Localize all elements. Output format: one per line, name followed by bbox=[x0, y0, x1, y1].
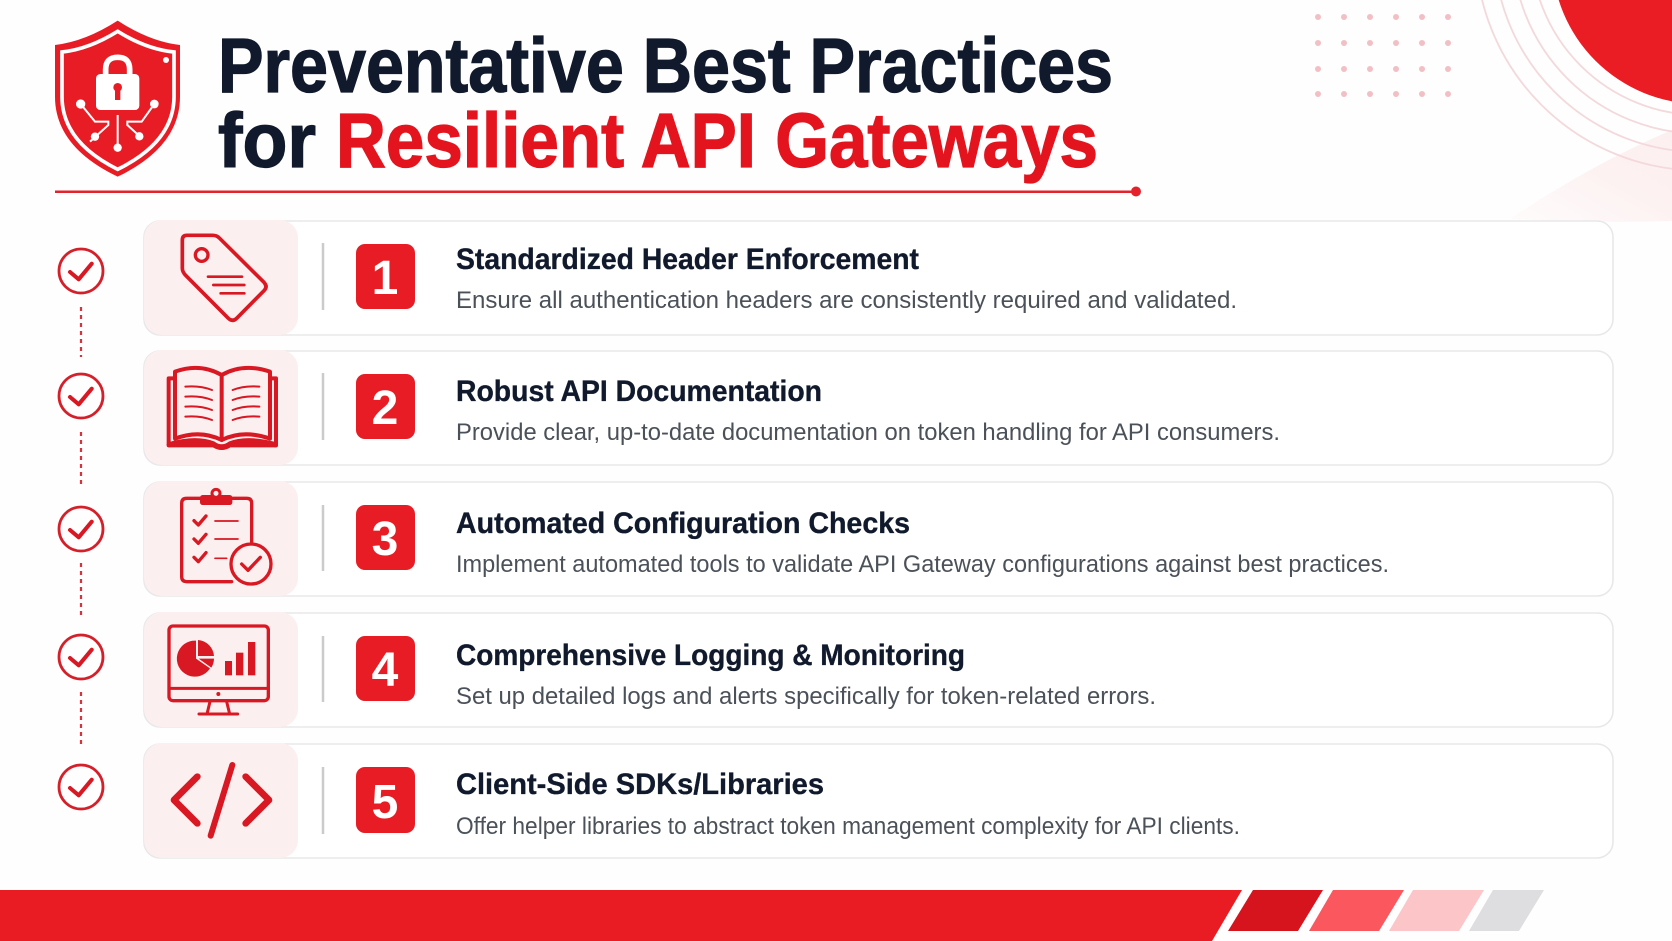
decorative corner: swoosh, rings and red circle bbox=[1476, 0, 1672, 222]
icon: open book bbox=[169, 368, 276, 448]
footer bar with stripes bbox=[0, 890, 1544, 941]
number badge 3: 3 bbox=[372, 513, 398, 566]
number badge 4 bbox=[356, 636, 415, 701]
title: for bbox=[218, 98, 316, 184]
step 4 row bbox=[59, 612, 1613, 727]
number badge 2 bbox=[356, 374, 415, 439]
icon panel 4 bbox=[144, 612, 298, 727]
icon: code brackets bbox=[174, 765, 269, 836]
heading 3: Automated Configuration Checks bbox=[456, 507, 910, 540]
card 4 bbox=[144, 613, 1613, 727]
heading 2: Robust API Documentation bbox=[456, 375, 822, 408]
divider 4 bbox=[322, 636, 324, 702]
description 4: Set up detailed logs and alerts specifically for token-related errors. bbox=[456, 683, 1156, 710]
step 5 row bbox=[59, 743, 1613, 858]
title: Preventative Best Practices bbox=[218, 23, 1113, 109]
description 5: Offer helper libraries to abstract token management complexity for API clients. bbox=[456, 813, 1240, 840]
check marker 4 bbox=[59, 635, 103, 679]
check marker 1 bbox=[59, 249, 103, 293]
number badge 1: 1 bbox=[372, 252, 398, 305]
card 1 bbox=[144, 221, 1613, 335]
title underline with end dot bbox=[55, 186, 1141, 196]
number badge 3 bbox=[356, 505, 415, 570]
timeline connectors bbox=[80, 307, 82, 747]
check marker 5 bbox=[59, 765, 103, 809]
decorative dot grid bbox=[1315, 14, 1451, 97]
card 5 bbox=[144, 744, 1613, 858]
icon: price tag bbox=[182, 235, 266, 320]
icon panel 2 bbox=[144, 350, 298, 465]
card 3 bbox=[144, 482, 1613, 596]
step 3 row bbox=[59, 481, 1613, 596]
icon panel 5 bbox=[144, 743, 298, 858]
title bbox=[218, 23, 1113, 184]
icon panel 1 bbox=[144, 220, 298, 335]
description 3: Implement automated tools to validate API Gateway configurations against best practices. bbox=[456, 551, 1389, 578]
number badge 2: 2 bbox=[372, 382, 398, 435]
divider 5 bbox=[322, 767, 324, 834]
heading 4: Comprehensive Logging & Monitoring bbox=[456, 639, 965, 672]
step 1 row bbox=[59, 220, 1613, 335]
number badge 5: 5 bbox=[372, 776, 398, 829]
step 2 row bbox=[59, 350, 1613, 465]
divider 3 bbox=[322, 505, 324, 571]
number badge 4: 4 bbox=[372, 644, 399, 697]
description 1: Ensure all authentication headers are consistently required and validated. bbox=[456, 287, 1237, 314]
divider 1 bbox=[322, 243, 324, 310]
heading 5: Client-Side SDKs/Libraries bbox=[456, 768, 824, 801]
heading 1: Standardized Header Enforcement bbox=[456, 243, 919, 276]
icon: shield with padlock and circuit bbox=[55, 21, 180, 177]
check marker 3 bbox=[59, 507, 103, 551]
number badge 1 bbox=[356, 244, 415, 309]
icon: clipboard checklist bbox=[182, 489, 271, 584]
card 2 bbox=[144, 351, 1613, 465]
divider 2 bbox=[322, 373, 324, 440]
title: Resilient API Gateways bbox=[336, 98, 1098, 184]
icon: monitor dashboard bbox=[169, 626, 268, 714]
check marker 2 bbox=[59, 374, 103, 418]
description 2: Provide clear, up-to-date documentation on token handling for API consumers. bbox=[456, 419, 1280, 446]
icon panel 3 bbox=[144, 481, 298, 596]
number badge 5 bbox=[356, 767, 415, 833]
